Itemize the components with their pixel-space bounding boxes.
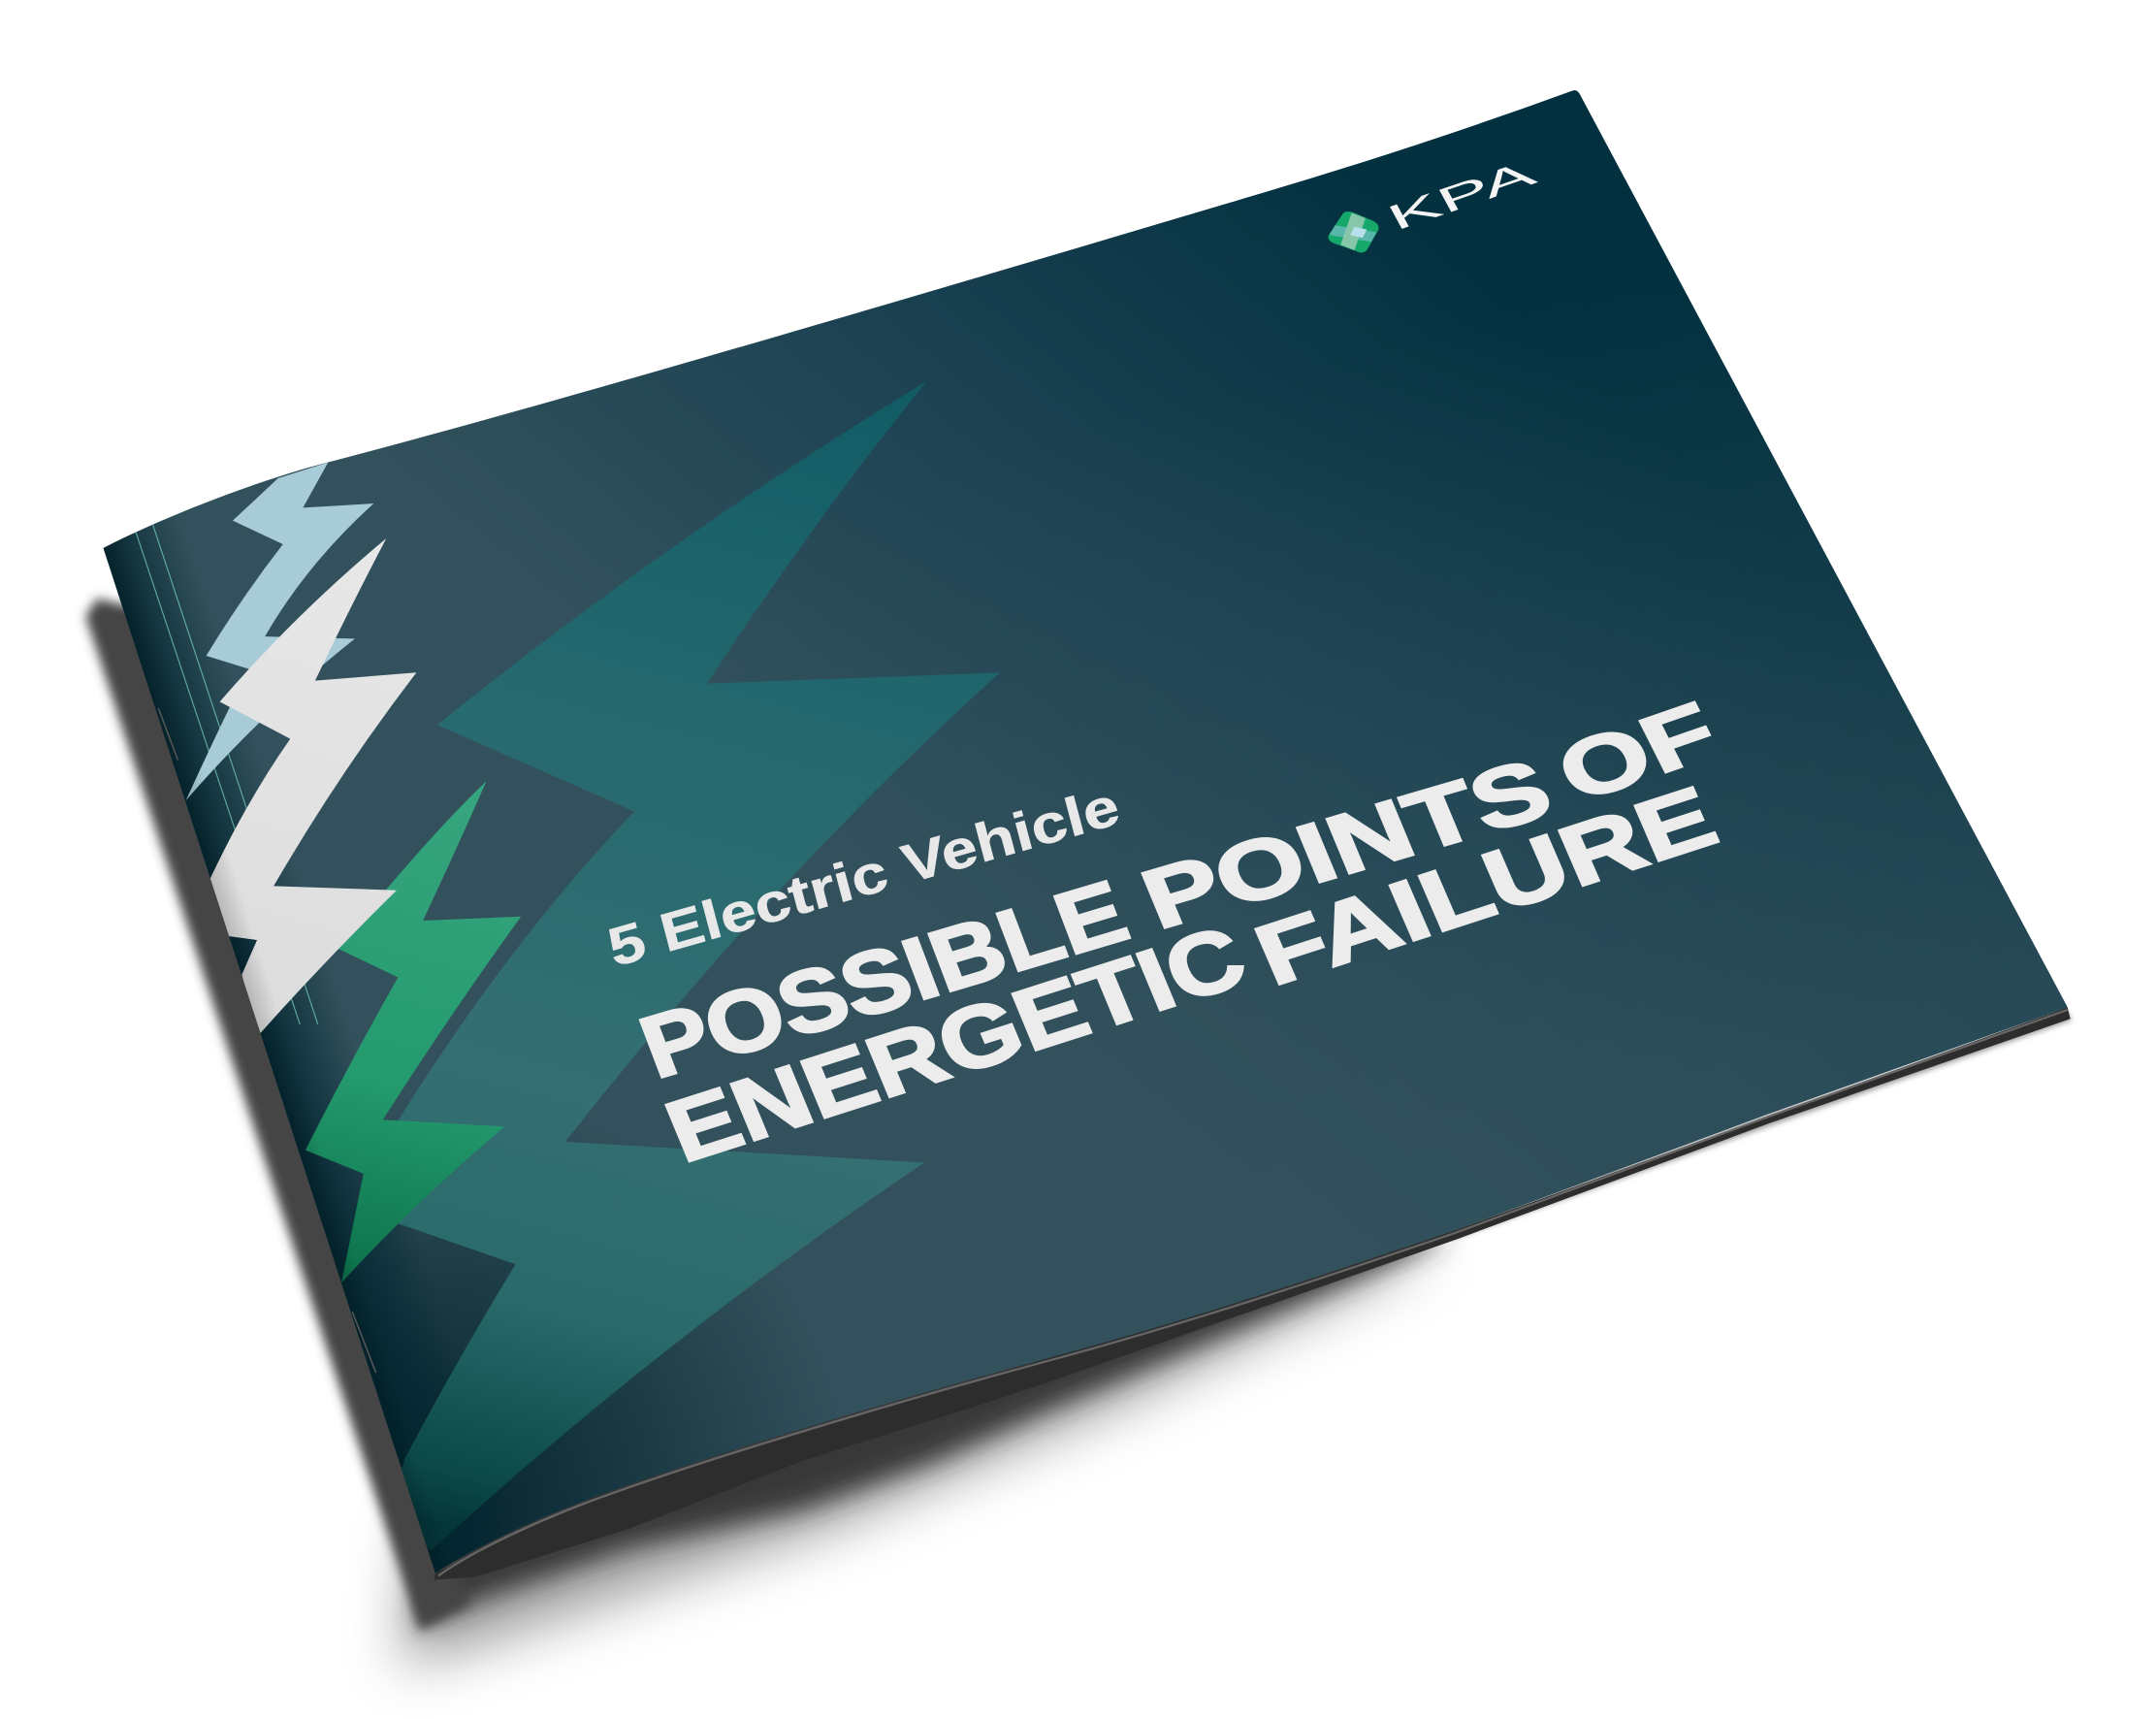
white lightning bolt: [208, 538, 416, 1037]
title: POINTS: [1129, 741, 1564, 947]
title: [627, 685, 1732, 1181]
light blue lightning bolt: [186, 463, 373, 800]
green lightning bolt: [306, 781, 521, 1282]
title: POSSIBLE: [627, 862, 1140, 1097]
lighter page edge: [438, 1010, 2068, 1576]
soft drop shadow: [85, 599, 2072, 1666]
large translucent teal lightning bolt: [373, 381, 1000, 1550]
title: FAILURE: [1241, 767, 1729, 1003]
cover artwork: [103, 90, 2068, 1573]
staples: [158, 708, 376, 1373]
logo wordmark: KPA: [1380, 153, 1542, 238]
cover background: [103, 90, 2068, 1573]
thin vertical lines: [136, 524, 318, 1024]
title: OF: [1543, 685, 1732, 819]
back page wedge and edge: [434, 1007, 2071, 1580]
subtitle: 5 Electric Vehicle: [602, 776, 1126, 979]
spine shading: [103, 543, 405, 1479]
logo mark: [1328, 211, 1379, 252]
title: ENERGETIC: [653, 907, 1259, 1181]
